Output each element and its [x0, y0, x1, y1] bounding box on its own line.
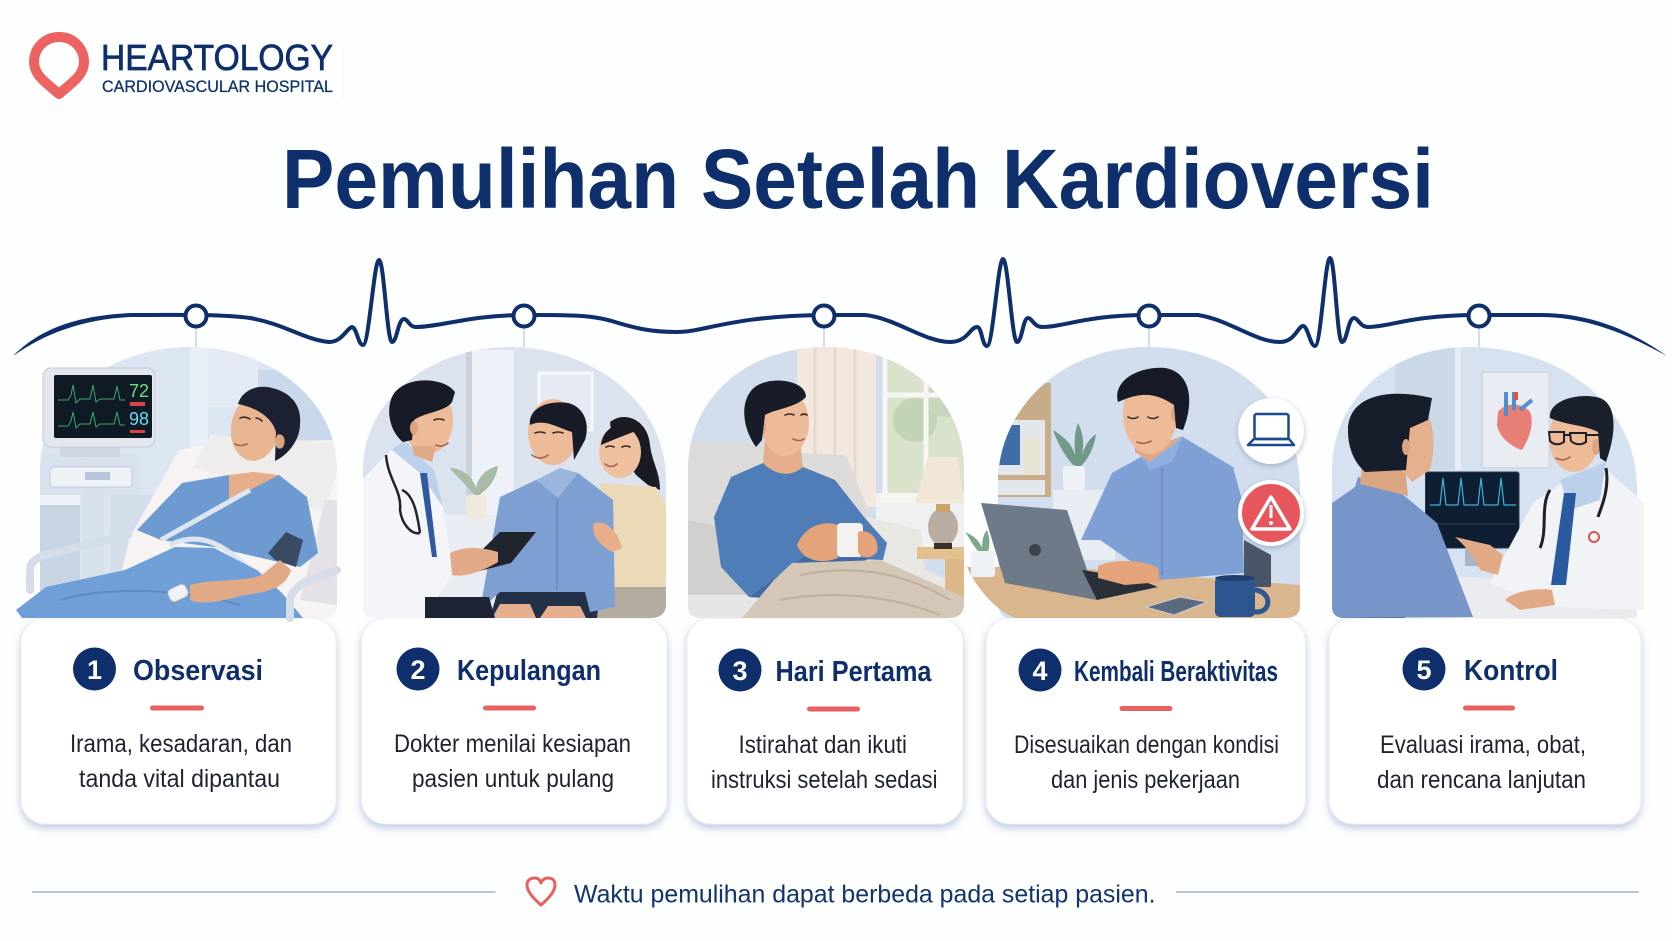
number badge 3: 3	[732, 656, 748, 686]
ECG timeline	[13, 258, 1667, 356]
patient seen from behind	[1332, 477, 1473, 618]
patient trousers	[492, 592, 598, 618]
accent bar	[150, 706, 204, 710]
card title: Kembali Beraktivitas	[1074, 656, 1278, 688]
card text	[711, 731, 938, 794]
card text: Evaluasi irama, obat,	[1380, 731, 1586, 759]
chair	[1332, 606, 1405, 618]
timeline node 2	[514, 306, 534, 326]
doctor's coat	[1490, 470, 1644, 610]
card text: tanda vital dipantau	[79, 765, 280, 793]
patient shirt	[480, 473, 615, 612]
title: Pemulihan Setelah Kardioversi	[282, 132, 1434, 226]
typing hands	[1098, 561, 1160, 585]
plant	[450, 466, 498, 497]
card title: Hari Pertama	[776, 656, 932, 688]
tie	[420, 473, 437, 557]
card text: instruksi setelah sedasi	[711, 766, 938, 794]
timeline node 3	[814, 306, 834, 326]
tablet and hand	[450, 532, 536, 576]
patient head	[528, 399, 587, 465]
illustration 3: resting at home with a mug	[680, 340, 970, 625]
laptop	[981, 503, 1158, 600]
doctor's hand on desk	[1505, 589, 1555, 610]
illustration 1: patient monitored in bed	[16, 340, 350, 625]
stand device	[50, 447, 132, 487]
card text: Dokter menilai kesiapan	[394, 730, 631, 758]
number badge 5	[1402, 648, 1446, 690]
small plant	[965, 530, 995, 577]
man's head	[744, 381, 809, 474]
card title: Kepulangan	[457, 655, 601, 687]
timeline node 5	[1468, 306, 1490, 326]
number badge 2: 2	[410, 655, 426, 685]
card text: pasien untuk pulang	[412, 765, 614, 793]
card text	[394, 730, 631, 793]
logo	[34, 37, 333, 96]
man's shirt	[1081, 437, 1244, 580]
illustration 2: doctor with patient and family	[355, 340, 675, 625]
wife's hand on shoulder	[593, 522, 622, 552]
icon: heart outline	[527, 878, 555, 905]
timeline node 1	[186, 306, 206, 326]
timeline node 4	[1138, 306, 1160, 326]
icon: laptop badge	[1238, 398, 1304, 464]
illustration 5: follow-up consultation	[1325, 340, 1645, 625]
card text: dan jenis pekerjaan	[1051, 766, 1240, 794]
heart rate reading: 72	[129, 381, 149, 401]
hands and mug	[797, 523, 878, 561]
number badge 4	[1018, 648, 1062, 692]
saturation reading: 98	[129, 409, 149, 429]
doctor's head	[1549, 396, 1614, 472]
pointing hand	[1455, 537, 1503, 575]
logo subtitle: CARDIOVASCULAR HOSPITAL	[102, 78, 333, 96]
phone	[1146, 597, 1207, 615]
card text	[1014, 731, 1279, 794]
forearm and finger oximeter	[166, 560, 291, 604]
number badge 4: 4	[1032, 656, 1048, 686]
sofa	[688, 443, 871, 526]
card 1: Observasi	[21, 618, 336, 824]
number badge 5: 5	[1416, 655, 1432, 685]
patient head	[227, 387, 300, 464]
blanket	[16, 547, 303, 618]
icon: logo pin	[34, 37, 84, 94]
number badge 3	[718, 648, 762, 692]
side table and lamp	[917, 547, 964, 559]
blood pressure cuff	[268, 532, 303, 567]
vital signs monitor	[43, 368, 155, 447]
patient hands	[492, 604, 586, 618]
ECG monitor	[1426, 472, 1519, 566]
accent bar	[807, 706, 860, 712]
footer text: Waktu pemulihan dapat berbeda pada setiap pasien.	[574, 880, 1156, 908]
number badge 1: 1	[87, 655, 102, 685]
patient gown	[137, 475, 318, 567]
illustration 4: back to work at a laptop	[965, 340, 1310, 625]
footer note	[32, 878, 1639, 908]
card title: Observasi	[133, 655, 263, 687]
card text: dan rencana lanjutan	[1377, 766, 1586, 794]
accent bar	[1120, 706, 1172, 711]
doctor's stethoscope	[1540, 468, 1607, 548]
bed rails	[30, 535, 337, 618]
card 3: Hari Pertama	[687, 618, 963, 824]
accent bar	[1463, 706, 1515, 710]
number badge 1	[73, 648, 116, 690]
icon: warning badge	[1240, 482, 1302, 544]
card text: Istirahat dan ikuti	[738, 731, 907, 759]
stethoscope	[386, 455, 420, 533]
desk and papers	[1455, 576, 1644, 618]
card text	[70, 730, 292, 793]
background plant	[1053, 423, 1096, 467]
man's head	[1117, 368, 1189, 462]
card 2: Kepulangan	[362, 618, 667, 824]
logo name: HEARTOLOGY	[101, 37, 333, 78]
card 5: Kontrol	[1329, 618, 1641, 824]
wall poster with heart	[1482, 372, 1550, 468]
card text	[1377, 731, 1586, 794]
knitted blanket	[742, 560, 964, 618]
desk	[967, 567, 1300, 618]
doctor head	[389, 380, 455, 462]
card text: Disesuaikan dengan kondisi	[1014, 731, 1279, 759]
card text: Irama, kesadaran, dan	[70, 730, 292, 758]
accent bar	[483, 706, 536, 710]
card 4: Kembali Beraktivitas	[986, 618, 1306, 824]
chair	[1244, 540, 1271, 587]
wife	[597, 417, 666, 618]
doctor coat	[363, 450, 458, 618]
doctor's tie	[1551, 493, 1576, 585]
card title: Kontrol	[1464, 655, 1558, 687]
number badge 2	[396, 648, 440, 690]
man's sweater	[714, 463, 887, 597]
coat logo	[1589, 532, 1599, 542]
coffee mug	[1215, 575, 1268, 617]
